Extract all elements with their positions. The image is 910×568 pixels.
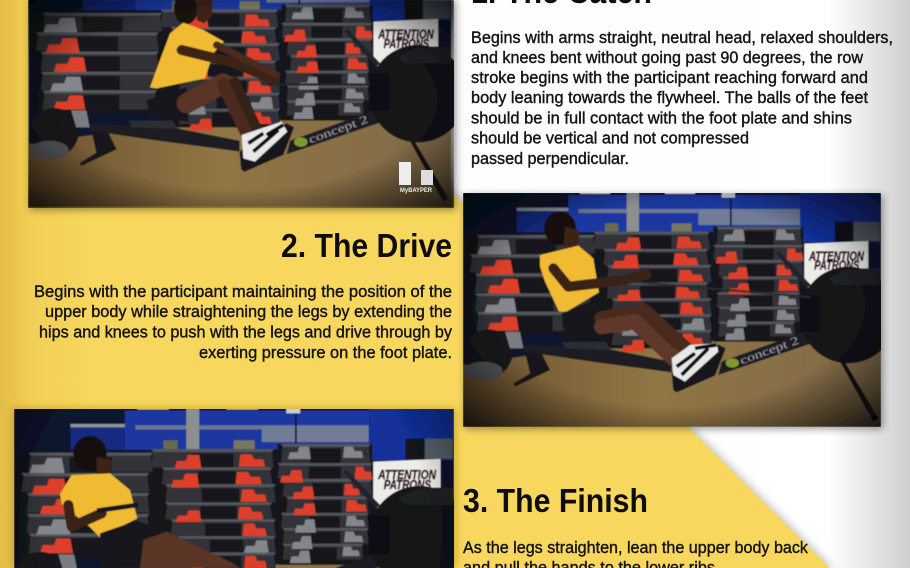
logo watermark	[399, 162, 433, 194]
text block: the catch: should be vertical and not compressed	[471, 130, 749, 148]
photo vignette	[463, 193, 881, 427]
photo 3: the finish: ATTENTION	[377, 467, 436, 482]
photo 1: the catch	[28, 0, 467, 210]
photo 2: the drive: PATRONS	[814, 259, 860, 273]
photo 1: the catch: ATTENTION	[377, 26, 434, 41]
photo 3: the finish	[12, 408, 470, 568]
rower figure: drive position	[540, 212, 811, 382]
photo vignette	[14, 409, 454, 568]
text block: the finish	[463, 539, 809, 568]
heading: 3. The Finish: 3. The Finish	[463, 482, 648, 519]
photo 1: the catch: PATRONS	[384, 36, 429, 51]
rower figure: catch position	[147, 0, 370, 162]
text block: the drive: hips and knees to push with the legs and drive through by	[39, 324, 453, 342]
photo 2: the drive: concept 2	[739, 335, 801, 367]
text block: the catch: body leaning towards the flywheel. The balls of the feet	[471, 89, 868, 107]
text block: the finish: As the legs straighten, lean the upper body back	[463, 539, 809, 557]
text block: the catch: and knees bent without going past 90 degrees, the row	[471, 49, 863, 67]
photo 2: the drive: ATTENTION	[808, 249, 865, 263]
text block: the catch: stroke begins with the participant reaching forward and	[471, 69, 868, 87]
photo 2: the drive	[463, 192, 897, 429]
text block: the drive: upper body while straightening the legs by extending the	[45, 303, 452, 321]
photo 3: the finish: PATRONS	[384, 477, 431, 492]
text block: the drive	[34, 283, 453, 362]
logo watermark: MyBAYPER	[400, 188, 433, 194]
text block: the catch: Begins with arms straight, neutral head, relaxed shoulders,	[471, 29, 893, 47]
text block: the catch	[471, 29, 893, 168]
text block: the catch: passed perpendicular.	[471, 150, 629, 168]
photo 1: the catch: concept 2	[307, 114, 370, 146]
rower figure: finish position	[60, 436, 240, 568]
photo vignette	[28, 0, 454, 208]
text block: the drive: Begins with the participant maintaining the position of the	[34, 283, 452, 301]
heading: 2. The Drive: 2. The Drive	[281, 227, 452, 264]
text block: the drive: exerting pressure on the foot plate.	[199, 344, 452, 362]
text block: the catch: should be in full contact with the foot plate and shins	[471, 110, 852, 128]
